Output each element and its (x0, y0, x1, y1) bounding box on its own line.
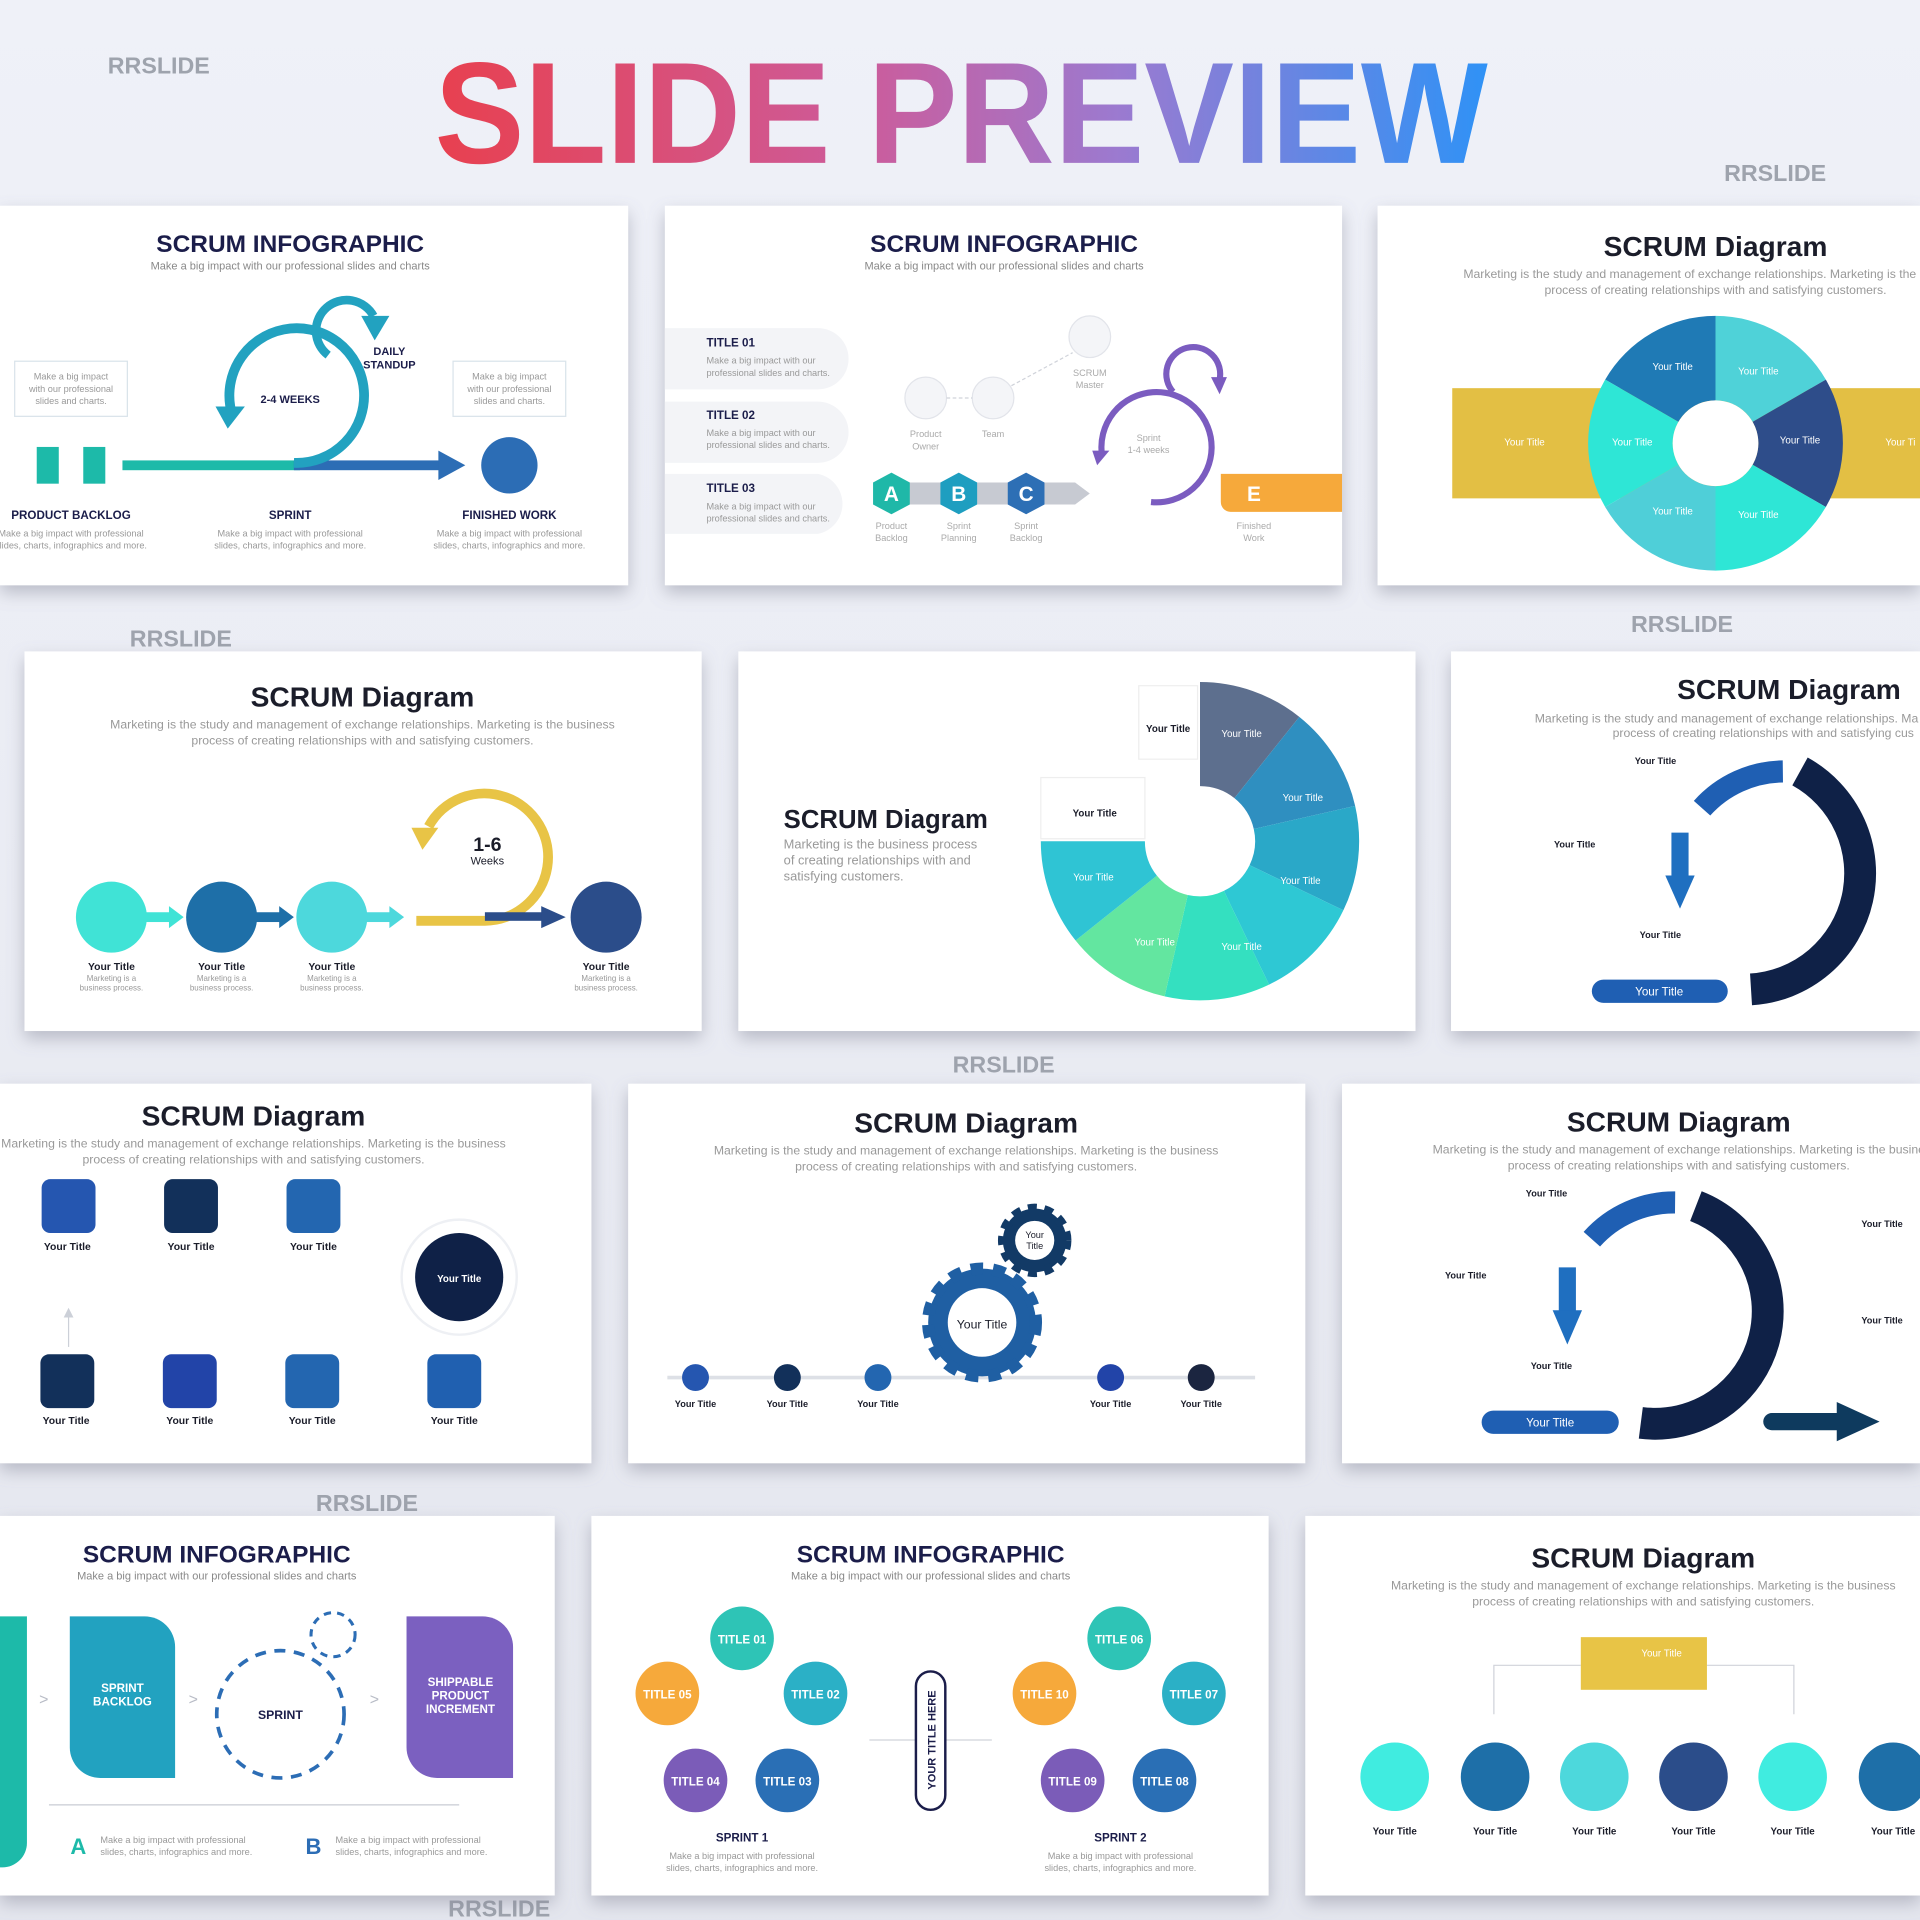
slide 7: scrum diagram icon grid: process of creating relationships with and satisfying customers. (82, 1152, 424, 1166)
slide 8: scrum diagram gears timeline: Your Title (675, 1399, 716, 1409)
slide 4: scrum diagram 1-6 weeks: business process. (574, 984, 638, 993)
slide 11: scrum infographic sprint cycles: SCRUM INFOGRAPHIC (797, 1541, 1065, 1568)
slide 5: scrum diagram partial donut: satisfying customers. (784, 868, 904, 883)
slide 10: scrum infographic sprint flow: Make a big impact with professional (100, 1835, 246, 1845)
slide 12: scrum diagram circles row: Your Title (1473, 1826, 1518, 1837)
slide 2: scrum infographic roles: Master (1076, 380, 1104, 390)
slide 10: scrum infographic sprint flow: B (306, 1834, 321, 1859)
slide 11: scrum infographic sprint cycles: TITLE 05 (643, 1688, 692, 1701)
slide 1: scrum infographic sprint loop: PRODUCT BACKLOG (11, 509, 131, 522)
watermarks: RRSLIDE (953, 1052, 1055, 1078)
slide 5: scrum diagram partial donut (738, 651, 1416, 1031)
slide 2: scrum infographic roles: 1-4 weeks (1128, 445, 1170, 455)
slide 2: scrum infographic roles: Sprint (947, 521, 971, 531)
slide 11: scrum infographic sprint cycles: SPRINT 2 (1094, 1832, 1147, 1845)
slide 1: scrum infographic sprint loop: slides and charts. (35, 396, 107, 406)
slide 12: scrum diagram circles row: Your Title (1572, 1826, 1617, 1837)
slide 2: scrum infographic roles: E (1247, 483, 1261, 506)
slide 2: scrum infographic roles: A (884, 483, 899, 506)
slide 2: scrum infographic roles: TITLE 02 (707, 409, 755, 422)
slide 10: scrum infographic sprint flow: Make a big impact with professional (336, 1835, 481, 1845)
slide 2: scrum infographic roles: Backlog (875, 533, 908, 543)
slide 1: scrum infographic sprint loop: Make a big impact (472, 372, 547, 382)
slide 8: scrum diagram gears timeline: Your Title (767, 1399, 808, 1409)
slide 10: scrum infographic sprint flow: > (370, 1691, 379, 1708)
slide 5: scrum diagram partial donut: Marketing is the business process (784, 837, 977, 852)
slide 12: scrum diagram circles row: Marketing is the study and management of exchange relationships. Marketing is the business (1391, 1578, 1896, 1592)
slide 4: scrum diagram 1-6 weeks: business process. (80, 984, 143, 993)
slide 8: scrum diagram gears timeline: Your Title (1180, 1399, 1222, 1409)
slide 3: scrum diagram donut with yellow band: process of creating relationships with and satisfying customers. (1544, 283, 1887, 297)
slide 2: scrum infographic roles: SCRUM INFOGRAPHIC (870, 231, 1138, 258)
slide 1: scrum infographic sprint loop: SCRUM INFOGRAPHIC (156, 231, 424, 258)
slide 6: scrum diagram arc: Your Title (1635, 986, 1683, 999)
slide 9: scrum diagram arc with arrow: Your Title (1445, 1270, 1486, 1280)
slide 11: scrum infographic sprint cycles: slides, charts, infographics and more. (666, 1863, 818, 1873)
slide 2: scrum infographic roles: Work (1243, 533, 1265, 543)
slide 3: scrum diagram donut with yellow band: Your Title (1738, 510, 1779, 521)
slide 9: scrum diagram arc with arrow: Your Title (1526, 1417, 1574, 1430)
slide 4: scrum diagram 1-6 weeks: SCRUM Diagram (251, 682, 474, 713)
slide 7: scrum diagram icon grid: Your Title (168, 1242, 215, 1253)
slide 2: scrum infographic roles: Product (876, 521, 908, 531)
slide 1: scrum infographic sprint loop: with our professional (466, 384, 551, 394)
slide 3: scrum diagram donut with yellow band: Your Title (1612, 438, 1652, 449)
watermarks: RRSLIDE (1631, 611, 1733, 637)
slide 5: scrum diagram partial donut: Your Title (1280, 876, 1321, 887)
slide 5: scrum diagram partial donut: Your Title (1221, 942, 1262, 953)
slide 4: scrum diagram 1-6 weeks: Your Title (583, 962, 630, 973)
slide 10: scrum infographic sprint flow: > (39, 1691, 48, 1708)
slide 5: scrum diagram partial donut: Your Title (1146, 724, 1191, 735)
slide 5: scrum diagram partial donut: Your Title (1283, 793, 1323, 804)
slide 10: scrum infographic sprint flow: SHIPPABLE (428, 1676, 493, 1689)
slide 3: scrum diagram donut with yellow band: Your Title (1738, 367, 1779, 378)
slide 9: scrum diagram arc with arrow: Marketing is the study and management of exchange relationships. Marketing is the busine (1433, 1142, 1920, 1156)
slide 2: scrum infographic roles: SCRUM (1073, 368, 1107, 378)
slide 7: scrum diagram icon grid: Your Title (290, 1242, 337, 1253)
slide 3: scrum diagram donut with yellow band (1378, 206, 1920, 585)
slide 3: scrum diagram donut with yellow band: Your Ti (1885, 438, 1915, 449)
slide 12: scrum diagram circles row: Your Title (1373, 1826, 1417, 1837)
slide 7: scrum diagram icon grid: Your Title (431, 1416, 478, 1427)
slide 4: scrum diagram 1-6 weeks: Marketing is a (307, 974, 357, 983)
slide 2: scrum infographic roles: Team (982, 429, 1005, 439)
slide 11: scrum infographic sprint cycles: TITLE 08 (1140, 1775, 1189, 1788)
slide 9: scrum diagram arc with arrow: SCRUM Diagram (1567, 1106, 1791, 1137)
slide 7: scrum diagram icon grid: Your Title (437, 1274, 482, 1285)
slide 7: scrum diagram icon grid: SCRUM Diagram (142, 1100, 365, 1131)
slide 2: scrum infographic roles: Sprint (1137, 433, 1161, 443)
slide 10: scrum infographic sprint flow: INCREMENT (426, 1703, 495, 1716)
slide 11: scrum infographic sprint cycles: TITLE 07 (1170, 1688, 1218, 1701)
slide 2: scrum infographic roles: Planning (941, 533, 977, 543)
slide 8: scrum diagram gears timeline: process of creating relationships with and satisfying customers. (795, 1160, 1137, 1174)
slide 10: scrum infographic sprint flow: SPRINT (101, 1682, 144, 1695)
slide 2: scrum infographic roles: professional slides and charts. (707, 368, 830, 378)
slide 2: scrum infographic roles: Product (910, 429, 942, 439)
slide 2: scrum infographic roles: TITLE 03 (707, 482, 756, 495)
slide 4: scrum diagram 1-6 weeks: Marketing is a (87, 974, 137, 983)
slide 2: scrum infographic roles: Backlog (1010, 533, 1042, 543)
slide 4: scrum diagram 1-6 weeks: Marketing is the study and management of exchange relationships. Marketing is the business (110, 718, 615, 732)
slide 11: scrum infographic sprint cycles: TITLE 09 (1048, 1775, 1097, 1788)
slide 11: scrum infographic sprint cycles: YOUR TITLE HERE (927, 1690, 939, 1790)
slide 6: scrum diagram arc: SCRUM Diagram (1677, 674, 1901, 705)
slide 11: scrum infographic sprint cycles (591, 1516, 1269, 1896)
slide 4: scrum diagram 1-6 weeks: Marketing is a (197, 974, 247, 983)
slide 1: scrum infographic sprint loop: slides, charts, infographics and more. (214, 541, 366, 551)
slide 2: scrum infographic roles: Make a big impact with our (707, 501, 816, 511)
slide 8: scrum diagram gears timeline: SCRUM Diagram (854, 1108, 1078, 1139)
slide 1: scrum infographic sprint loop: FINISHED WORK (462, 509, 557, 522)
slide 9: scrum diagram arc with arrow: Your Title (1861, 1316, 1903, 1326)
slide 5: scrum diagram partial donut: SCRUM Diagram (784, 806, 988, 834)
slide 6: scrum diagram arc: Your Title (1554, 839, 1595, 849)
slide 1: scrum infographic sprint loop: slides and charts. (474, 396, 545, 406)
slide 7: scrum diagram icon grid: Your Title (43, 1416, 90, 1427)
slide 1: scrum infographic sprint loop: slides, charts, infographics and more. (433, 541, 585, 551)
slide 11: scrum infographic sprint cycles: TITLE 04 (671, 1775, 720, 1788)
slide 6: scrum diagram arc (1451, 651, 1920, 1031)
slide 12: scrum diagram circles row: Your Title (1671, 1826, 1716, 1837)
slide 4: scrum diagram 1-6 weeks: Your Title (198, 962, 245, 973)
slide 2: scrum infographic roles: B (951, 483, 966, 506)
slide 11: scrum infographic sprint cycles: TITLE 01 (718, 1633, 767, 1646)
slide 11: scrum infographic sprint cycles: Make a big impact with our professional slides and charts (791, 1571, 1071, 1583)
slide 2: scrum infographic roles: Finished (1237, 521, 1271, 531)
slide 4: scrum diagram 1-6 weeks: 1-6 (473, 834, 502, 856)
slide 5: scrum diagram partial donut: Your Title (1134, 937, 1175, 948)
slide 4: scrum diagram 1-6 weeks: Your Title (308, 962, 356, 973)
slide 12: scrum diagram circles row: Your Title (1871, 1826, 1916, 1837)
slide 8: scrum diagram gears timeline: Title (1026, 1241, 1043, 1251)
slide 4: scrum diagram 1-6 weeks: Marketing is a (581, 974, 631, 983)
slide 9: scrum diagram arc with arrow (1342, 1084, 1920, 1463)
slide 12: scrum diagram circles row: process of creating relationships with and satisfying customers. (1472, 1594, 1814, 1608)
slide 11: scrum infographic sprint cycles: TITLE 06 (1095, 1633, 1144, 1646)
slide 6: scrum diagram arc: Marketing is the study and management of exchange relationships. Ma (1535, 711, 1919, 725)
slide 6: scrum diagram arc: Your Title (1640, 930, 1681, 940)
slide 9: scrum diagram arc with arrow: Your Title (1861, 1219, 1903, 1229)
slide 1: scrum infographic sprint loop: Make a big impact with professional (218, 528, 363, 538)
slide 2: scrum infographic roles: Make a big impact with our (707, 428, 816, 438)
slide 4: scrum diagram 1-6 weeks: business process. (300, 984, 364, 993)
slide 1: scrum infographic sprint loop: Make a big impact with professional (0, 528, 144, 538)
slide 2: scrum infographic roles (665, 206, 1342, 585)
slide 3: scrum diagram donut with yellow band: Your Title (1652, 362, 1693, 373)
slide 4: scrum diagram 1-6 weeks: business process. (190, 984, 253, 993)
slide 3: scrum diagram donut with yellow band: SCRUM Diagram (1604, 231, 1827, 262)
slide 12: scrum diagram circles row (1305, 1516, 1920, 1896)
watermarks: RRSLIDE (316, 1490, 418, 1516)
slide 10: scrum infographic sprint flow (0, 1516, 555, 1896)
slide 8: scrum diagram gears timeline: Your Title (1090, 1399, 1131, 1409)
slide 8: scrum diagram gears timeline (628, 1084, 1305, 1463)
slide 9: scrum diagram arc with arrow: Your Title (1526, 1188, 1567, 1198)
watermarks: RRSLIDE (1724, 160, 1826, 186)
slide 12: scrum diagram circles row: Your Title (1641, 1649, 1682, 1660)
slide 10: scrum infographic sprint flow: SPRINT (258, 1708, 303, 1722)
slide 10: scrum infographic sprint flow: PRODUCT (432, 1690, 489, 1703)
slide 8: scrum diagram gears timeline: Marketing is the study and management of exchange relationships. Marketing is the business (714, 1144, 1218, 1158)
slide 7: scrum diagram icon grid: Your Title (166, 1416, 213, 1427)
slide 1: scrum infographic sprint loop (0, 206, 628, 585)
slide 10: scrum infographic sprint flow: slides, charts, infographics and more. (336, 1847, 487, 1857)
slide 5: scrum diagram partial donut: of creating relationships with and (784, 852, 971, 867)
slide 6: scrum diagram arc: process of creating relationships with and satisfying cus (1613, 726, 1914, 740)
slide 2: scrum infographic roles: Owner (912, 441, 939, 451)
slide 1: scrum infographic sprint loop: Make a big impact with our professional slides and charts (151, 260, 430, 272)
slide 10: scrum infographic sprint flow: slides, charts, infographics and more. (100, 1847, 252, 1857)
watermarks: RRSLIDE (130, 626, 232, 652)
slide 7: scrum diagram icon grid: Marketing is the study and management of exchange relationships. Marketing is the business (1, 1136, 506, 1150)
slide 7: scrum diagram icon grid: Your Title (289, 1416, 336, 1427)
slide 1: scrum infographic sprint loop: STANDUP (363, 360, 416, 372)
slide 5: scrum diagram partial donut: Your Title (1221, 729, 1262, 740)
slide 1: scrum infographic sprint loop: 2-4 WEEKS (261, 394, 320, 406)
slide 6: scrum diagram arc: Your Title (1635, 756, 1676, 766)
slide 11: scrum infographic sprint cycles: slides, charts, infographics and more. (1044, 1863, 1196, 1873)
slide 3: scrum diagram donut with yellow band: Your Title (1652, 506, 1693, 517)
slide 4: scrum diagram 1-6 weeks: Your Title (88, 962, 135, 973)
slide 11: scrum infographic sprint cycles: SPRINT 1 (716, 1832, 769, 1845)
slide 2: scrum infographic roles: professional slides and charts. (707, 514, 830, 524)
slide 1: scrum infographic sprint loop: Make a big impact (34, 372, 109, 382)
slide 2: scrum infographic roles: Sprint (1014, 521, 1039, 531)
slide 5: scrum diagram partial donut: Your Title (1073, 872, 1114, 883)
slide 1: scrum infographic sprint loop: Make a big impact with professional (437, 528, 582, 538)
slide 2: scrum infographic roles: TITLE 01 (707, 337, 756, 350)
slide 11: scrum infographic sprint cycles: Make a big impact with professional (669, 1851, 815, 1861)
slide 8: scrum diagram gears timeline: Your Title (957, 1318, 1008, 1332)
slide 9: scrum diagram arc with arrow: Your Title (1531, 1361, 1572, 1371)
slide 11: scrum infographic sprint cycles: TITLE 03 (763, 1775, 812, 1788)
slide 10: scrum infographic sprint flow: BACKLOG (93, 1696, 152, 1709)
slide 4: scrum diagram 1-6 weeks: Weeks (471, 855, 505, 867)
slide 3: scrum diagram donut with yellow band: Your Title (1780, 435, 1820, 446)
slide 1: scrum infographic sprint loop: with our professional (28, 384, 113, 394)
slide 12: scrum diagram circles row: Your Title (1771, 1826, 1815, 1837)
slide 12: scrum diagram circles row: SCRUM Diagram (1531, 1542, 1755, 1573)
slide 10: scrum infographic sprint flow: SCRUM INFOGRAPHIC (83, 1541, 351, 1568)
slide 2: scrum infographic roles: professional slides and charts. (707, 440, 830, 450)
slide 2: scrum infographic roles: Make a big impact with our (707, 356, 816, 366)
slide 3: scrum diagram donut with yellow band: Your Title (1504, 438, 1545, 449)
slide 10: scrum infographic sprint flow: > (189, 1691, 198, 1708)
slide 10: scrum infographic sprint flow: Make a big impact with our professional slides and charts (77, 1571, 357, 1583)
slide 1: scrum infographic sprint loop: DAILY (373, 346, 406, 358)
slide 11: scrum infographic sprint cycles: Make a big impact with professional (1048, 1851, 1193, 1861)
slide 3: scrum diagram donut with yellow band: Marketing is the study and management of exchange relationships. Marketing is the (1463, 267, 1916, 281)
slide 11: scrum infographic sprint cycles: TITLE 02 (791, 1688, 840, 1701)
slide 7: scrum diagram icon grid: Your Title (44, 1242, 91, 1253)
slide 9: scrum diagram arc with arrow: process of creating relationships with and satisfying customers. (1508, 1158, 1850, 1172)
watermarks: RRSLIDE (108, 52, 210, 78)
slide 4: scrum diagram 1-6 weeks (24, 651, 702, 1031)
slide 2: scrum infographic roles: C (1019, 483, 1034, 506)
slide 8: scrum diagram gears timeline: Your (1025, 1230, 1044, 1240)
slide 10: scrum infographic sprint flow: A (70, 1834, 86, 1859)
slide 5: scrum diagram partial donut: Your Title (1073, 809, 1117, 820)
slide 8: scrum diagram gears timeline: Your Title (857, 1399, 899, 1409)
slide 1: scrum infographic sprint loop: SPRINT (269, 509, 312, 522)
title: SLIDE PREVIEW: SLIDE PREVIEW (435, 32, 1488, 194)
slide 7: scrum diagram icon grid (0, 1084, 591, 1463)
slide 11: scrum infographic sprint cycles: TITLE 10 (1020, 1688, 1069, 1701)
slide 4: scrum diagram 1-6 weeks: process of creating relationships with and satisfying customers. (191, 733, 533, 747)
slide 2: scrum infographic roles: Make a big impact with our professional slides and charts (864, 260, 1144, 272)
